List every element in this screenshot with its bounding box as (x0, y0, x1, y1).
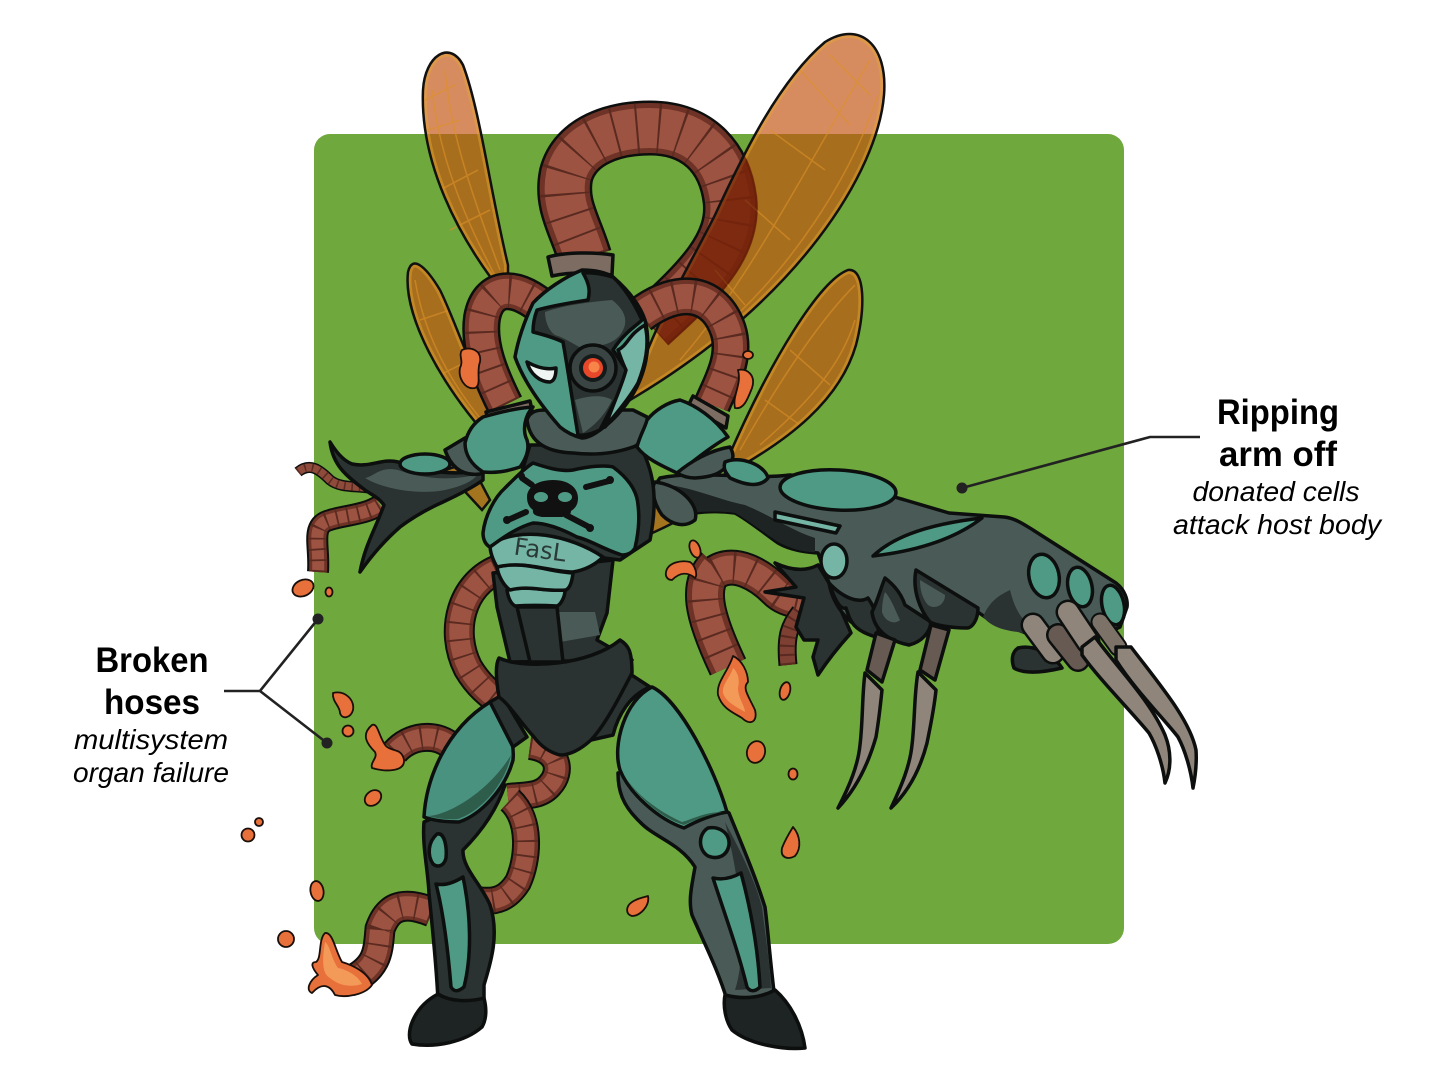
head teal strip (605, 325, 647, 427)
callout: ripping arm off (956, 393, 1383, 540)
leader line right (956, 437, 1200, 494)
head shell (515, 270, 648, 438)
hose: right hand thin (787, 612, 800, 665)
hose: between legs (478, 800, 526, 901)
head mid shade (545, 300, 625, 350)
right leg (618, 687, 805, 1048)
claw: right B (1116, 647, 1196, 788)
neck collar top (548, 253, 613, 276)
heading: broken hoses (96, 641, 208, 722)
right small teal plate (724, 460, 768, 484)
hose: right hand broken (705, 566, 728, 667)
right forearm (655, 475, 1127, 650)
hose: right of head (640, 296, 731, 405)
heading: ripping arm off: arm off (1219, 435, 1337, 474)
wing: lower body extension right (636, 480, 705, 540)
abdomen plate 2 (497, 565, 573, 590)
left shoulder collar (486, 401, 532, 420)
skull and crossbones (503, 472, 614, 532)
abdomen plate 1 (490, 534, 603, 572)
wings (408, 34, 884, 540)
neck collar (527, 410, 648, 454)
hose: lower left broken (348, 906, 432, 982)
left thigh plate (424, 702, 513, 822)
hose: torso tail (459, 570, 505, 705)
subtext: donated cells: donated cells (1192, 476, 1360, 507)
hose: behind pelvis loop (508, 746, 557, 797)
wing: upper left (423, 53, 508, 300)
right lower leg (618, 770, 775, 1000)
blood: head hoses (460, 348, 480, 388)
subtext: multisystem organ failure: organ failure (73, 757, 229, 788)
cyber eye (570, 345, 616, 391)
head dark cap (533, 273, 642, 435)
wing: lower right (725, 270, 862, 475)
hoses around head (298, 291, 805, 982)
blood: left drops (290, 576, 316, 600)
left shin plate (436, 877, 470, 991)
heading: ripping arm off (1217, 393, 1339, 474)
knuckle lump (1012, 647, 1062, 672)
finger plates (1025, 551, 1063, 601)
heading: broken hoses: hoses (104, 683, 200, 722)
wing: lower body extension left (445, 462, 490, 510)
subtext: donated cells: attack host body (1173, 509, 1383, 540)
hose: right hand upper (716, 568, 805, 603)
abdomen plate 3 (507, 588, 565, 606)
wing: upper right (630, 32, 886, 402)
left boot (409, 994, 486, 1045)
left forearm with shredded end (330, 442, 483, 572)
right calf shade (725, 822, 771, 990)
right shoulder under (677, 447, 733, 478)
right thigh plate (618, 687, 727, 828)
left knee plate (429, 834, 446, 866)
hose: mid left broken (395, 737, 450, 752)
blood: right drops (687, 539, 703, 559)
FasL text: FasL (512, 533, 569, 568)
right arm (653, 467, 1196, 808)
hose: left hand thin (298, 467, 368, 488)
elbow joint (653, 482, 696, 525)
right shin plate (713, 873, 760, 991)
white eye (527, 362, 556, 382)
knuckle segments (829, 570, 1050, 645)
claw: down 1 (838, 633, 895, 808)
wrist plate (873, 518, 982, 556)
dark lower forearm (669, 485, 815, 552)
right hand shredded glove (765, 563, 851, 675)
wing: lower left (406, 262, 486, 422)
heading: broken hoses: Broken (96, 641, 208, 680)
right shoulder plate (637, 400, 728, 473)
left arm (330, 438, 490, 572)
forearm plate (779, 467, 897, 513)
leader lines left (224, 614, 332, 748)
wrist knob (821, 544, 847, 578)
pelvis (496, 640, 632, 755)
torso (465, 396, 768, 606)
hose: left hand thick (317, 505, 380, 572)
left leg (409, 702, 513, 1045)
subtext: donated cells (1173, 476, 1383, 540)
blood splatter (242, 348, 799, 996)
heading: ripping arm off: Ripping (1217, 393, 1339, 432)
chest plate (483, 463, 639, 555)
right knee plate (700, 828, 729, 858)
left elbow (445, 438, 490, 474)
hose: large top hose (565, 128, 730, 325)
finger capsules (1033, 612, 1118, 660)
claw: right A (1082, 637, 1170, 783)
hose: left of head (481, 291, 548, 405)
teal strip (775, 512, 840, 533)
hip joints (490, 672, 650, 747)
head (515, 270, 648, 438)
left lower leg (424, 785, 505, 1005)
claw: down 2 (891, 625, 949, 808)
callout: broken hoses (73, 614, 332, 788)
chest dark back (500, 445, 654, 560)
abdomen (493, 560, 632, 662)
left forearm plate (400, 454, 450, 474)
right boot (724, 990, 805, 1048)
subtext: multisystem organ failure (73, 724, 229, 788)
subtext: multisystem organ failure: multisystem (74, 724, 228, 755)
right shoulder collar (688, 396, 728, 428)
green square background (314, 134, 1124, 944)
hose seen through wing (656, 156, 758, 345)
left shoulder plate (465, 407, 533, 472)
